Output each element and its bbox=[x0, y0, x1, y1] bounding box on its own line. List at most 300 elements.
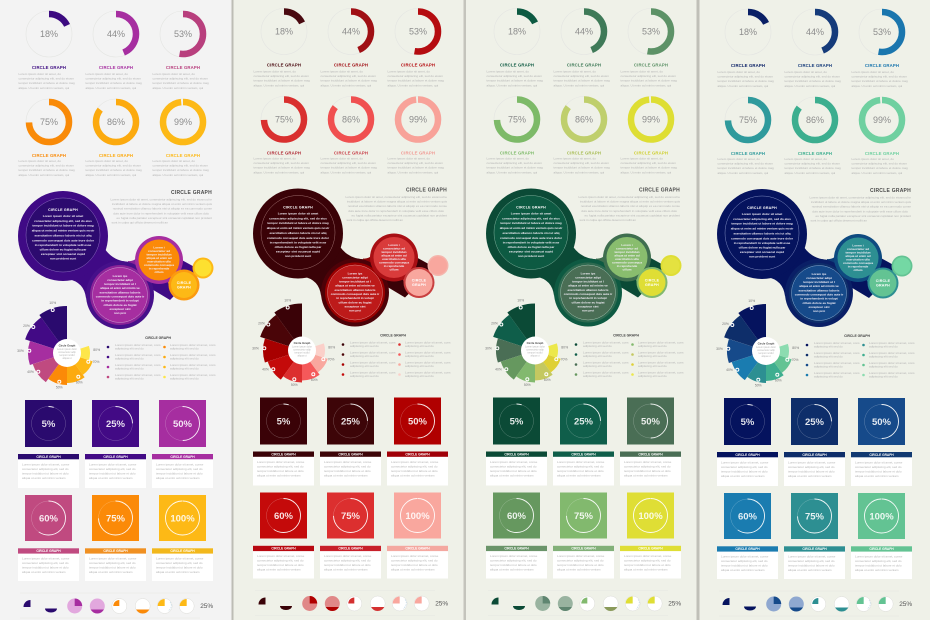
card: 5%: CIRCLE GRAPH bbox=[504, 452, 529, 456]
tile: 5% bbox=[493, 398, 540, 444]
heading and paragraph: CIRCLE GRAPH bbox=[639, 188, 680, 194]
card: 60% bbox=[717, 546, 778, 579]
card: 5% bbox=[717, 452, 778, 486]
legend: Lorem ipsum dolor sit amet, cons bbox=[170, 343, 216, 347]
bubble chart bbox=[486, 188, 682, 326]
label: ring 75%: CIRCLE GRAPH bbox=[731, 151, 765, 156]
bubble 1: cillum dolore eu fugiat nulla par bbox=[275, 245, 322, 249]
heading and paragraph: duis aute irure dolor in reprehenderit in voluptate velit esse cillum dolo bbox=[812, 209, 908, 213]
legend: Lorem ipsum dolor sit amet, cons bbox=[638, 370, 684, 374]
ring: 99% bbox=[160, 99, 206, 145]
label: ring 44%: tempor incididunt ut labore et dolore mag bbox=[784, 79, 841, 83]
tile: 60%: 60% bbox=[738, 512, 758, 522]
bubble 2: Lorem ips bbox=[113, 274, 128, 278]
label: ring 75%: consectetur adipiscing elit, sed do eiusm bbox=[254, 161, 309, 165]
bubble 4: CIRCLE bbox=[645, 278, 660, 282]
fan chart: 70% bbox=[792, 358, 798, 362]
bubble 3: commodo consequa bbox=[144, 263, 174, 267]
panel: purple and orange variant bbox=[17, 11, 216, 618]
card: 25%: CIRCLE GRAPH bbox=[338, 452, 363, 456]
legend: Lorem ipsum dolor sit amet, cons bbox=[405, 360, 451, 364]
fan chart: 20% bbox=[722, 322, 729, 326]
ring: 18%: 18% bbox=[40, 29, 58, 39]
legend: adipiscing elit sed do bbox=[583, 344, 612, 348]
card: 5%: CIRCLE GRAPH bbox=[271, 452, 296, 456]
bubble 3: Lorem i bbox=[852, 244, 864, 248]
card: 75%: consectetur adipiscing elit, sed do bbox=[89, 561, 136, 565]
label: ring 75%: Lorem ipsum dolor sit amet, do bbox=[718, 157, 760, 161]
tile: 60% bbox=[724, 493, 771, 539]
label: ring 75% bbox=[486, 150, 543, 174]
tile: 25%: 25% bbox=[106, 419, 126, 430]
fan chart: aliqua ut bbox=[297, 354, 307, 358]
heading and paragraph: sunt in culpa qui officia deserunt mollit an bbox=[346, 218, 403, 222]
legend: adipiscing elit sed do bbox=[405, 354, 434, 358]
label: ring 53%: consectetur adipiscing elit, sed do eiusm bbox=[620, 74, 676, 78]
card: 50%: aliqua ut enim ad minim veniam bbox=[855, 474, 899, 478]
bubble 1: consectetur adipiscing elit, sed do eius bbox=[733, 217, 791, 221]
label: ring 44%: CIRCLE GRAPH bbox=[567, 62, 601, 68]
legend: CIRCLE GRAPH bbox=[380, 334, 406, 338]
card: 5%: CIRCLE GRAPH bbox=[735, 453, 760, 457]
tile: 100% bbox=[159, 495, 206, 541]
card: 5% bbox=[18, 454, 79, 488]
label: ring 44%: aliqua. Ut enim ad minim veniam, qui bbox=[784, 84, 836, 88]
bubble 2: exercitation ullamco laboris bbox=[568, 288, 609, 292]
bubble 1: tempor incididunt ut labore et dolore mag bbox=[267, 221, 329, 225]
card: 100% bbox=[387, 546, 448, 578]
card: 100% bbox=[152, 548, 213, 581]
ring: 44%: 44% bbox=[575, 26, 593, 36]
fan chart: 80% bbox=[328, 346, 335, 350]
card: 60%: consectetur adipiscing elit, sed do bbox=[490, 558, 537, 562]
legend bbox=[806, 334, 915, 378]
tile: 75%: 75% bbox=[106, 514, 126, 524]
bubble 1: in reprehenderit in voluptate velit esse bbox=[734, 241, 791, 245]
bubble 1: excepteur sint occaecat cupid bbox=[509, 250, 553, 254]
bubble 2: in reprehenderit in volupt bbox=[101, 299, 139, 303]
label: ring 18%: CIRCLE GRAPH bbox=[267, 62, 301, 68]
card: 75%: consectetur adipiscing elit, sed do bbox=[324, 558, 371, 562]
heading and paragraph: incididunt ut labore et dolore magna aliqua ut enim ad minim veniam quis bbox=[811, 200, 911, 204]
label: ring 53%: aliqua. Ut enim ad minim veniam, qui bbox=[852, 84, 903, 88]
legend: Lorem ipsum dolor sit amet, cons bbox=[350, 370, 396, 374]
legend: Lorem ipsum dolor sit amet, cons bbox=[350, 360, 396, 364]
heading and paragraph: CIRCLE GRAPH bbox=[870, 188, 911, 194]
card: 75%: tempor incididunt ut labore et dolo bbox=[788, 564, 835, 568]
fan chart: Lorem ipsum dolor bbox=[525, 346, 545, 348]
card: 50%: CIRCLE GRAPH bbox=[638, 452, 663, 456]
bubble 1: CIRCLE GRAPH bbox=[283, 206, 313, 210]
bubble 2: tempor incididunt ut l bbox=[104, 282, 136, 286]
tile: 60% bbox=[25, 495, 72, 541]
bubble 1: cillum dolore eu fugiat nulla par bbox=[739, 246, 786, 250]
bubble 2: cillum dolore eu fugiat bbox=[338, 300, 372, 304]
card: 50%: CIRCLE GRAPH bbox=[869, 453, 894, 457]
card: 75%: tempor incididunt ut labore et dolo bbox=[324, 563, 371, 567]
heading and paragraph: Lorem ipsum dolor sit amet, consectetur adipiscing elit, sed do eiusmod te bbox=[111, 198, 212, 202]
ring: 18%: 18% bbox=[739, 27, 757, 37]
panel: blue variant bbox=[716, 9, 915, 616]
label: ring 44% bbox=[554, 62, 610, 87]
fan chart: 40% bbox=[262, 368, 269, 372]
label: ring 86%: CIRCLE GRAPH bbox=[334, 150, 368, 156]
fan chart: 10% bbox=[284, 298, 291, 302]
ring: 99% bbox=[628, 96, 674, 142]
tile: 100% bbox=[627, 492, 674, 538]
label: ring 53%: tempor incididunt ut labore et dolore mag bbox=[620, 79, 677, 83]
tile: 75% bbox=[560, 492, 607, 538]
label: ring 75% bbox=[254, 150, 310, 174]
bubble 2: non proi bbox=[114, 311, 126, 315]
card: 100%: aliqua ut enim ad minim veniam bbox=[624, 568, 668, 572]
bubble 1: excepteur sint occaecat cupid bbox=[276, 250, 320, 254]
ring: 86%: 86% bbox=[575, 114, 593, 124]
label: ring 75%: Lorem ipsum dolor sit amet, do bbox=[18, 159, 61, 163]
heading and paragraph: nostrud exercitation ullamco laboris nisi ut aliquip ex ea commodo conse bbox=[812, 205, 911, 209]
ring: 86% bbox=[328, 96, 374, 142]
tile: 60%: 60% bbox=[507, 511, 527, 522]
label: ring 99%: tempor incididunt ut labore et dolore mag bbox=[152, 168, 209, 172]
fan chart: 40% bbox=[726, 368, 733, 372]
bubble 1: CIRCLE GRAPH bbox=[48, 208, 78, 212]
card: 75%: tempor incididunt ut labore et dolo bbox=[557, 563, 604, 567]
bubble 2: excepteur sint bbox=[110, 307, 130, 311]
heading and paragraph bbox=[579, 188, 680, 222]
label: ring 53%: aliqua. Ut enim ad minim veniam, qui bbox=[152, 86, 204, 90]
card: 75%: aliqua ut enim ad minim veniam bbox=[89, 570, 133, 574]
card: 25%: aliqua ut enim ad minim veniam bbox=[324, 474, 368, 478]
tile: 5%: 5% bbox=[510, 416, 524, 428]
legend: Lorem ipsum dolor sit amet, cons bbox=[170, 373, 216, 377]
card: 50% bbox=[620, 452, 681, 486]
bubble 3: cillum bbox=[390, 268, 399, 272]
label: ring 75%: Lorem ipsum dolor sit amet, do bbox=[254, 156, 296, 160]
card: 25%: aliqua ut enim ad minim veniam bbox=[788, 474, 832, 478]
card: 75%: Lorem ipsum dolor sit amet, conse bbox=[557, 554, 605, 558]
card: 100%: tempor incididunt ut labore et dolo bbox=[156, 566, 203, 570]
label: ring 86%: tempor incididunt ut labore et dolore mag bbox=[86, 168, 142, 172]
legend bbox=[575, 334, 684, 378]
bubble 1 bbox=[253, 188, 343, 278]
label: ring 53%: tempor incididunt ut labore et dolore mag bbox=[852, 79, 908, 83]
bubble 2: consectetur adipi bbox=[107, 278, 133, 282]
card: 60%: tempor incididunt ut labore et dolo bbox=[257, 563, 304, 567]
ring: 99%: 99% bbox=[873, 115, 891, 125]
label: ring 99%: Lorem ipsum dolor sit amet, do bbox=[388, 156, 430, 160]
legend: Lorem ipsum dolor sit amet, cons bbox=[638, 340, 684, 344]
label: ring 18%: consectetur adipiscing elit, sed do eiusm bbox=[718, 75, 773, 79]
bubble 1: in reprehenderit in voluptate velit esse bbox=[503, 240, 560, 244]
card: 25% bbox=[784, 452, 845, 486]
legend: adipiscing elit sed do bbox=[583, 364, 612, 368]
ring: 75% bbox=[494, 96, 540, 142]
heading and paragraph: Lorem ipsum dolor sit amet, consectetur adipiscing elit, sed do eiusmod te bbox=[579, 195, 680, 199]
card: 75%: Lorem ipsum dolor sit amet, conse bbox=[788, 554, 836, 558]
legend: adipiscing elit sed do bbox=[638, 344, 667, 348]
bubble 2: consectetur adipi bbox=[575, 276, 601, 280]
tile: 75% bbox=[92, 495, 139, 541]
label: ring 99% bbox=[852, 151, 908, 175]
label: ring 18%: Lorem ipsum dolor sit amet, do bbox=[254, 70, 296, 74]
legend: adipiscing elit sed do bbox=[869, 354, 898, 358]
label: ring 99%: consectetur adipiscing elit, sed do eiusm bbox=[152, 164, 208, 168]
tile: 100% bbox=[858, 493, 905, 539]
label: ring 86%: CIRCLE GRAPH bbox=[798, 151, 832, 156]
heading and paragraph bbox=[810, 188, 911, 223]
card: 50%: consectetur adipiscing elit, sed do bbox=[855, 465, 902, 469]
fan chart: 10% bbox=[748, 299, 755, 303]
legend: adipiscing elit sed do bbox=[583, 354, 612, 358]
tile: 75% bbox=[791, 493, 838, 539]
label: ring 86% bbox=[86, 153, 142, 177]
fan chart: 20% bbox=[23, 324, 30, 328]
bubble 4: GRAPH bbox=[645, 283, 659, 287]
bubble 4 bbox=[636, 267, 668, 298]
heading and paragraph: eu fugiat nulla pariatur excepteur sint occaecat cupidatat non proident bbox=[117, 216, 212, 220]
card: 25%: CIRCLE GRAPH bbox=[802, 453, 827, 457]
card: 60%: consectetur adipiscing elit, sed do bbox=[22, 561, 69, 565]
tile: 100%: 100% bbox=[405, 511, 430, 522]
panel: dark red variant bbox=[252, 8, 451, 616]
fan chart: consectetur adip bbox=[757, 349, 775, 352]
tile: 100%: 100% bbox=[170, 514, 195, 524]
label: ring 44% bbox=[784, 63, 841, 88]
ring: 44% bbox=[328, 8, 374, 54]
bubble 2 bbox=[785, 259, 853, 327]
label: ring 86% bbox=[320, 150, 377, 174]
card: 25%: aliqua ut enim ad minim veniam bbox=[557, 474, 601, 478]
bubble 1 bbox=[486, 188, 576, 278]
label: ring 18%: Lorem ipsum dolor sit amet, do bbox=[718, 70, 760, 74]
label: ring 75% bbox=[18, 153, 75, 177]
label: ring 75%: consectetur adipiscing elit, sed do eiusm bbox=[18, 164, 74, 168]
card: 75%: aliqua ut enim ad minim veniam bbox=[324, 568, 368, 572]
card: 100%: consectetur adipiscing elit, sed do bbox=[624, 558, 671, 562]
bubble chart bbox=[253, 188, 448, 326]
bubble 3: aliqua ut enim ad bbox=[381, 254, 407, 258]
card: 100%: tempor incididunt ut labore et dolo bbox=[391, 563, 438, 567]
card: 5%: aliqua ut enim ad minim veniam bbox=[721, 474, 765, 478]
label: ring 44%: consectetur adipiscing elit, sed do eiusm bbox=[554, 74, 609, 78]
legend: adipiscing elit sed do bbox=[405, 374, 434, 378]
tile: 60%: 60% bbox=[39, 514, 59, 524]
fan chart: 40% bbox=[495, 368, 502, 372]
bubble 2: excepteur sint bbox=[345, 304, 365, 308]
icon strip: 25% bbox=[668, 600, 681, 608]
legend: adipiscing elit sed do bbox=[115, 346, 144, 350]
ring: 86%: 86% bbox=[806, 115, 824, 125]
bubble 2: cillum dolore eu fugiat bbox=[571, 300, 605, 304]
fan chart: consectetur adip bbox=[293, 348, 311, 352]
bubble 2: non proi bbox=[582, 308, 594, 312]
card: 60%: tempor incididunt ut labore et dolo bbox=[490, 563, 537, 567]
label: ring 18% bbox=[18, 65, 75, 90]
heading and paragraph: duis aute irure dolor in reprehenderit in voluptate velit esse cillum dolo bbox=[581, 209, 677, 213]
bubble 3: aliqua ut enim ad bbox=[614, 254, 640, 258]
panel: green variant bbox=[485, 8, 684, 616]
bubble 1: tempor incididunt ut labore et dolore mag bbox=[500, 221, 562, 225]
legend: Lorem ipsum dolor sit amet, cons bbox=[405, 370, 451, 374]
label: ring 44%: Lorem ipsum dolor sit amet, do bbox=[320, 70, 363, 74]
legend: Lorem ipsum dolor sit amet, cons bbox=[170, 353, 216, 357]
icon strip bbox=[255, 590, 448, 616]
ring: 44% bbox=[561, 8, 607, 54]
card: 60%: CIRCLE GRAPH bbox=[504, 547, 529, 551]
icon strip bbox=[20, 593, 213, 618]
legend: Lorem ipsum dolor sit amet, cons bbox=[115, 363, 161, 367]
card: 25%: tempor incididunt ut labore et dolo bbox=[324, 469, 371, 473]
heading and paragraph: incididunt ut labore et dolore magna aliqua ut enim ad minim veniam quis bbox=[112, 202, 212, 206]
legend: Lorem ipsum dolor sit amet, cons bbox=[583, 360, 629, 364]
tile: 50%: 50% bbox=[641, 416, 661, 428]
label: ring 18%: tempor incididunt ut labore et dolore mag bbox=[486, 79, 543, 83]
card: 5%: tempor incididunt ut labore et dolo bbox=[257, 469, 304, 473]
label: ring 75%: aliqua. Ut enim ad minim veniam, qui bbox=[486, 170, 538, 174]
label: ring 75%: tempor incididunt ut labore et dolore mag bbox=[718, 166, 774, 170]
tile: 25%: 25% bbox=[574, 416, 594, 428]
ring: 44%: 44% bbox=[107, 29, 125, 39]
bubble 3: in reprehende bbox=[848, 264, 869, 268]
bubble 5 bbox=[660, 255, 682, 276]
ring: 18% bbox=[26, 11, 72, 57]
label: ring 53% bbox=[620, 62, 677, 87]
bubble 2 bbox=[321, 258, 389, 326]
ring: 18% bbox=[725, 9, 771, 55]
legend: adipiscing elit sed do bbox=[869, 374, 898, 378]
bubble 1: non proident sunt bbox=[50, 256, 76, 260]
card: 25%: Lorem ipsum dolor sit amet, conse bbox=[557, 460, 605, 464]
bubble chart bbox=[717, 189, 912, 327]
label: ring 44%: aliqua. Ut enim ad minim veniam, qui bbox=[554, 83, 605, 87]
bubble 2: consectetur adipi bbox=[342, 276, 368, 280]
card: 25%: tempor incididunt ut labore et dolo bbox=[788, 470, 835, 474]
label: ring 99% bbox=[152, 153, 209, 177]
label: ring 75%: Lorem ipsum dolor sit amet, do bbox=[486, 156, 529, 160]
bubble 3: cillum bbox=[155, 270, 164, 274]
label: ring 44%: consectetur adipiscing elit, sed do eiusm bbox=[320, 74, 376, 78]
legend: Lorem ipsum dolor sit amet, cons bbox=[638, 360, 684, 364]
tile: 50% bbox=[394, 398, 441, 444]
bubble 3: commodo consequa bbox=[379, 260, 409, 264]
bubble 2: commodo consequat duis aute ir bbox=[331, 292, 380, 296]
legend: Lorem ipsum dolor sit amet, cons bbox=[583, 370, 629, 374]
label: ring 86%: aliqua. Ut enim ad minim veniam, qui bbox=[86, 173, 137, 177]
ring: 53%: 53% bbox=[642, 26, 660, 36]
legend: adipiscing elit sed do bbox=[869, 364, 898, 368]
legend: Lorem ipsum dolor sit amet, cons bbox=[814, 351, 860, 355]
fan chart: 70% bbox=[93, 360, 99, 364]
legend: Lorem ipsum dolor sit amet, cons bbox=[869, 361, 915, 365]
label: ring 99%: consectetur adipiscing elit, sed do eiusm bbox=[388, 161, 443, 165]
bubble 1: commodo consequat duis aute irure dolor bbox=[32, 238, 95, 242]
card: 5% bbox=[253, 452, 314, 486]
bubble 2: in reprehenderit in volupt bbox=[569, 296, 607, 300]
tile: 5% bbox=[260, 398, 307, 444]
card: 60%: Lorem ipsum dolor sit amet, conse bbox=[721, 554, 769, 558]
card: 100%: tempor incididunt ut labore et dolo bbox=[855, 564, 902, 568]
label: ring 53%: Lorem ipsum dolor sit amet, do bbox=[388, 70, 430, 74]
bubble 3: cillum bbox=[854, 268, 863, 272]
legend: Lorem ipsum dolor sit amet, cons bbox=[869, 341, 915, 345]
legend: adipiscing elit sed do bbox=[405, 364, 434, 368]
bubble 1: Lorem ipsum dolor sit amet bbox=[43, 214, 83, 218]
bubble 1: Lorem ipsum dolor sit amet bbox=[278, 212, 318, 216]
label: ring 99% bbox=[620, 150, 677, 174]
label: ring 86%: Lorem ipsum dolor sit amet, do bbox=[86, 159, 128, 163]
bubble 3: in reprehende bbox=[149, 266, 170, 270]
card: 5%: consectetur adipiscing elit, sed do bbox=[22, 467, 69, 471]
card: 75%: Lorem ipsum dolor sit amet, conse bbox=[324, 554, 372, 558]
bubble 4 bbox=[868, 268, 898, 298]
label: ring 99%: CIRCLE GRAPH bbox=[865, 151, 899, 156]
bubble 2: in reprehenderit in volupt bbox=[336, 296, 374, 300]
label: ring 75%: CIRCLE GRAPH bbox=[32, 153, 66, 158]
card: 50%: consectetur adipiscing elit, sed do bbox=[391, 464, 438, 468]
fan chart: Circle Graph bbox=[758, 342, 775, 346]
ring: 18%: 18% bbox=[275, 26, 293, 36]
bubble 2: Lorem ips bbox=[348, 272, 363, 276]
bubble 3 bbox=[834, 234, 882, 282]
card: 5%: Lorem ipsum dolor sit amet, conse bbox=[22, 462, 70, 466]
label: ring 44%: tempor incididunt ut labore et dolore mag bbox=[86, 81, 142, 85]
legend: Lorem ipsum dolor sit amet, cons bbox=[638, 350, 684, 354]
icon strip: 25% bbox=[435, 600, 448, 608]
tile: 60%: 60% bbox=[274, 511, 294, 522]
bubble 4: GRAPH bbox=[177, 286, 191, 290]
ring: 53%: 53% bbox=[174, 29, 192, 39]
label: ring 44%: Lorem ipsum dolor sit amet, do bbox=[784, 70, 827, 74]
bubble 1: exercitation ullamco laboris nisi ut aliq bbox=[502, 231, 560, 235]
bubble 2 bbox=[554, 258, 622, 326]
legend: adipiscing elit sed do bbox=[170, 356, 199, 360]
label: ring 53%: tempor incididunt ut labore et dolore mag bbox=[152, 81, 209, 85]
ring: 86%: 86% bbox=[342, 114, 360, 124]
label: ring 18%: CIRCLE GRAPH bbox=[32, 65, 66, 70]
fan chart: Lorem ipsum dolor bbox=[756, 346, 776, 349]
card: 25%: CIRCLE GRAPH bbox=[571, 452, 596, 456]
card: 60%: Lorem ipsum dolor sit amet, conse bbox=[490, 554, 538, 558]
bubble 4: CIRCLE bbox=[876, 279, 891, 283]
bubble 1: commodo consequat duis aute irure dolor bbox=[500, 236, 563, 240]
card: 50%: Lorem ipsum dolor sit amet, conse bbox=[855, 460, 903, 464]
label: ring 86%: tempor incididunt ut labore et dolore mag bbox=[320, 166, 377, 170]
label: ring 53% bbox=[152, 65, 209, 90]
card: 75%: consectetur adipiscing elit, sed do bbox=[788, 559, 835, 563]
legend: Lorem ipsum dolor sit amet, cons bbox=[869, 371, 915, 375]
heading and paragraph: eu fugiat nulla pariatur excepteur sint occaecat cupidatat non proident bbox=[816, 214, 911, 218]
card: 100%: Lorem ipsum dolor sit amet, conse bbox=[391, 554, 439, 558]
bubble 4 bbox=[168, 270, 200, 300]
card: 5%: tempor incididunt ut labore et dolo bbox=[22, 472, 69, 476]
card: 5%: tempor incididunt ut labore et dolo bbox=[721, 470, 768, 474]
card: 75% bbox=[85, 548, 146, 581]
fan chart: tempor incidid bbox=[60, 354, 75, 357]
tile: 100% bbox=[394, 492, 441, 538]
fan chart: 50% bbox=[291, 383, 298, 387]
legend: adipiscing elit sed do bbox=[814, 344, 843, 348]
card: 50%: consectetur adipiscing elit, sed do bbox=[624, 464, 671, 468]
label: ring 75% bbox=[718, 151, 774, 175]
card: 60%: CIRCLE GRAPH bbox=[271, 547, 296, 551]
card: 50%: aliqua ut enim ad minim veniam bbox=[624, 474, 668, 478]
label: ring 18%: aliqua. Ut enim ad minim veniam, qui bbox=[18, 86, 70, 90]
bubble 3: aliqua ut enim ad bbox=[845, 254, 871, 258]
card: 5% bbox=[486, 452, 547, 486]
ring: 75%: 75% bbox=[40, 117, 58, 127]
label: ring 53%: consectetur adipiscing elit, sed do eiusm bbox=[388, 74, 443, 78]
legend: CIRCLE GRAPH bbox=[613, 334, 639, 338]
